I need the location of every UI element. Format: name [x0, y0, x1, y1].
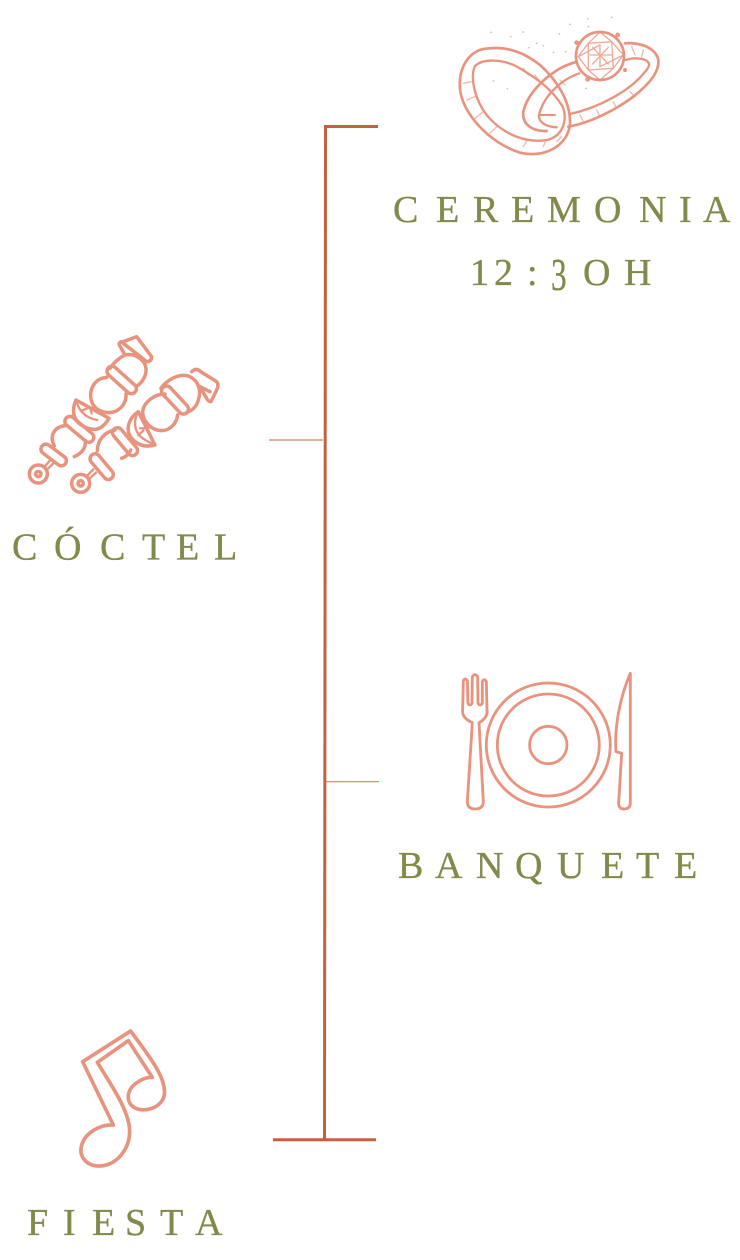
- time: 12:30h: 12:: [470, 252, 538, 294]
- icon: wedding rings: [460, 17, 658, 154]
- heading: fiesta: FIESTA: [27, 1202, 223, 1244]
- plate: [486, 683, 610, 807]
- icon: music note: [81, 1031, 165, 1166]
- heading: ceremonia: CEREMONIA: [393, 189, 731, 231]
- time: 12:30h: OH: [583, 252, 651, 294]
- left skewer: [29, 337, 152, 483]
- heading: cóctel: CÓCTEL: [12, 526, 237, 568]
- heading: banquete: BANQUETE: [398, 845, 697, 887]
- icon: plate with fork and knife: [463, 673, 630, 809]
- time: 12:30h: [470, 250, 651, 301]
- fork: [463, 675, 487, 809]
- icon: skewers: [29, 337, 218, 492]
- time: 12:30h: 3: [551, 250, 567, 301]
- right skewer: [72, 369, 218, 492]
- timeline axis with ticks: [269, 125, 379, 1140]
- knife: [616, 673, 630, 809]
